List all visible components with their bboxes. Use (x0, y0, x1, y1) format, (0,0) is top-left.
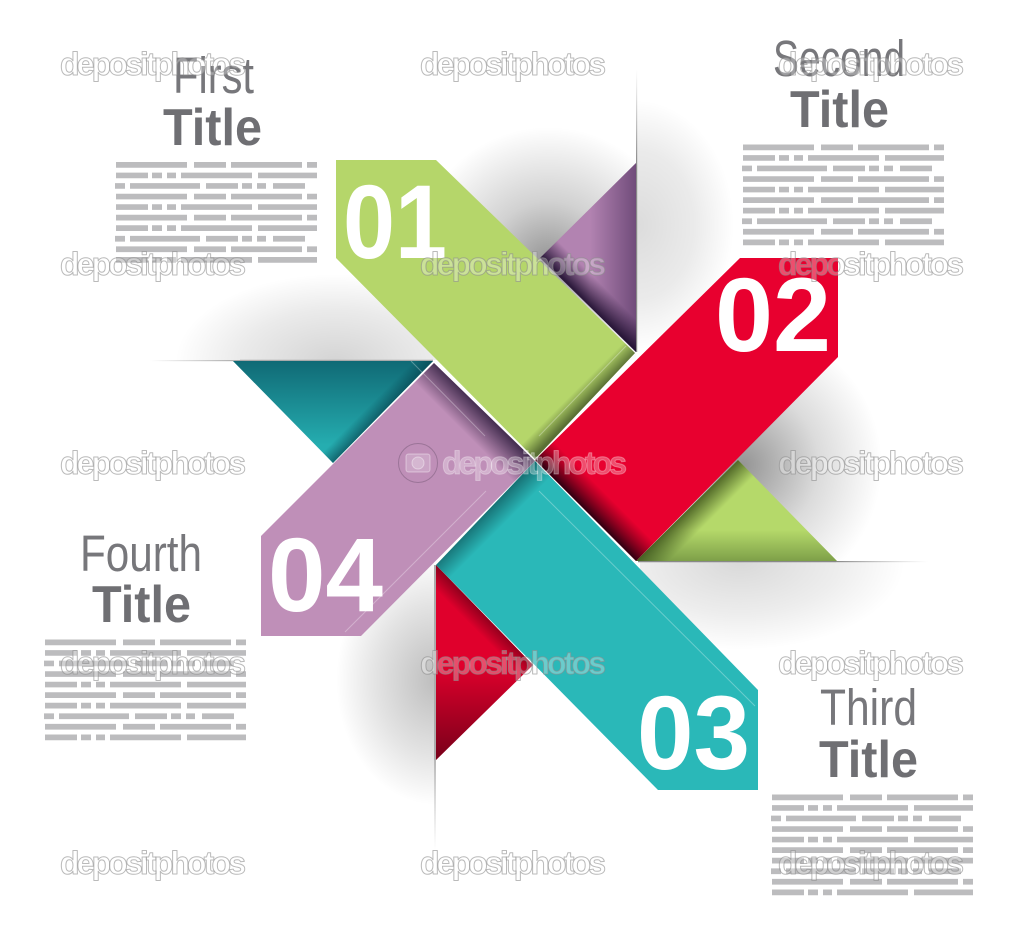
watermarks: depositphotos (60, 845, 246, 881)
heading: Fourth Title: Title (92, 576, 191, 634)
watermarks: depositphotos (420, 845, 606, 881)
text placeholder bars (742, 144, 944, 245)
heading: Fourth Title (80, 525, 202, 634)
watermarks: depositphotos (778, 845, 964, 881)
number 02: 02 (715, 257, 831, 374)
watermarks: depositphotos (420, 46, 606, 82)
watermarks: depositphotos (778, 645, 964, 681)
heading: Third Title (819, 679, 918, 789)
watermarks: depositphotos (420, 645, 606, 681)
heading: Second Title: Title (790, 81, 889, 139)
ribbon 04: purple (261, 361, 535, 636)
heading: First Title: Title (163, 99, 262, 157)
watermarks: depositphotos (60, 445, 246, 481)
watermarks: depositphotos (60, 246, 246, 282)
triangle: green, right (636, 460, 837, 561)
watermarks: depositphotos (778, 246, 964, 282)
text placeholder bars (771, 794, 973, 895)
block: second title (742, 30, 944, 245)
watermarks: depositphotos (778, 46, 964, 82)
heading: Third Title: Third (820, 679, 917, 736)
watermarks: depositphotos (60, 46, 246, 82)
triangle: purple, top (540, 163, 636, 352)
text placeholder bars (115, 162, 317, 263)
triangle: teal, left (233, 361, 433, 463)
ribbon 03: teal (436, 461, 758, 792)
block: fourth title (44, 525, 246, 740)
soft paper shadows (202, 121, 874, 790)
watermarks: depositphotos (442, 445, 627, 481)
icon: watermark camera (398, 444, 438, 482)
fold lines (150, 70, 928, 850)
text placeholder bars (44, 640, 246, 740)
heading: Third Title: Title (819, 731, 918, 789)
heading: First Title (163, 47, 262, 157)
triangle: red, bottom (436, 565, 533, 760)
heading: Second Title: Second (773, 30, 905, 87)
watermarks: depositphotos (60, 645, 246, 681)
heading: First Title: First (173, 47, 254, 104)
block: third title (771, 679, 973, 895)
heading: Fourth Title: Fourth (80, 525, 202, 582)
number 01: 01 (343, 164, 447, 281)
heading: Second Title (773, 30, 905, 139)
watermarks (60, 46, 964, 881)
watermarks: depositphotos (778, 445, 964, 481)
number 04: 04 (268, 517, 383, 634)
number 03: 03 (637, 675, 750, 792)
ribbon 02: red (535, 257, 838, 561)
ribbon 01: green (336, 160, 635, 459)
watermarks: depositphotos (420, 246, 606, 282)
block: first title (115, 47, 317, 263)
